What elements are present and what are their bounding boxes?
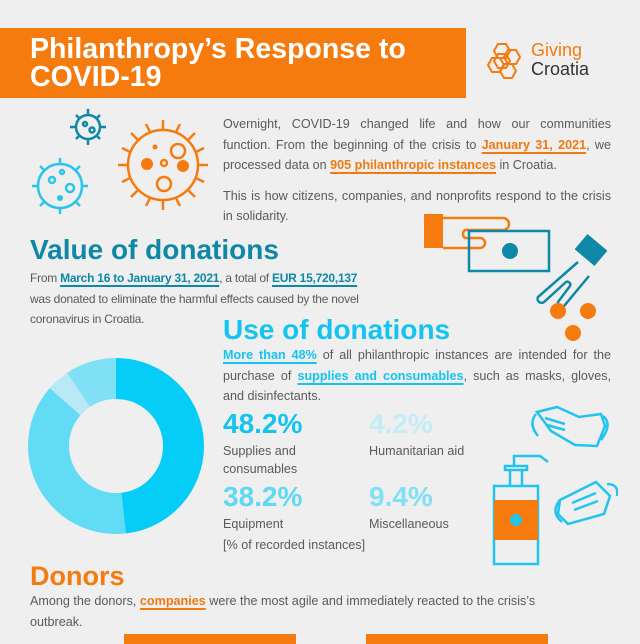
stat: 48.2%: 48.2% — [223, 408, 302, 439]
intro text — [223, 117, 611, 223]
title: COVID-19 — [30, 61, 161, 93]
orange boxes — [124, 634, 296, 644]
title banner — [0, 28, 466, 98]
title — [30, 33, 406, 93]
stat: 38.2%: Equipment — [223, 517, 283, 531]
value text: coronavirus in Croatia. — [30, 312, 144, 326]
note: [% of recorded instances] — [223, 538, 365, 552]
logo: Giving Croatia: Giving — [531, 40, 582, 60]
donors text: Among the donors, companies were the most agile and immediately reacted to the crisis’s outbreak. — [30, 594, 535, 628]
heading: Use of donations: Use of donations — [223, 314, 450, 345]
stat: 9.4% — [369, 481, 449, 531]
stat: 48.2% — [223, 408, 302, 476]
stat: 9.4%: 9.4% — [369, 481, 433, 512]
value text: was donated to eliminate the harmful effects caused by the novel — [30, 292, 359, 306]
stat: 9.4%: Miscellaneous — [369, 517, 449, 531]
intro text: Overnight, COVID-19 changed life and how our communities function. From the beginning of the crisis to January 31, 2021, we processed data on 905 philanthropic instances in Croatia. — [223, 117, 611, 172]
intro text: This is how citizens, companies, and nonprofits respond to the crisis in solidarity. — [223, 188, 611, 223]
value text: From March 16 to January 31, 2021, a total of EUR 15,720,137 — [30, 271, 357, 285]
stat: 38.2% — [223, 481, 302, 531]
stat: 4.2%: Humanitarian aid — [369, 444, 464, 458]
stat: 48.2%: Supplies and — [223, 444, 296, 458]
use text: More than 48% of all philanthropic instances are intended for the purchase of supplies and consumables, such as masks, gloves, and disinfectants. — [223, 348, 611, 403]
logo: Giving Croatia: Croatia — [531, 59, 589, 79]
value text — [30, 271, 359, 326]
logo: Giving Croatia — [486, 40, 589, 79]
icon: hands giving money — [424, 214, 608, 341]
stat: 4.2%: 4.2% — [369, 408, 433, 439]
title: Philanthropy’s Response to — [30, 33, 406, 65]
stat: 48.2%: consumables — [223, 462, 297, 476]
donut chart — [28, 358, 204, 534]
orange box 2 — [366, 634, 548, 644]
heading: Value of donations: Value of donations — [30, 234, 279, 265]
icon: viruses — [32, 109, 208, 214]
stat: 38.2%: 38.2% — [223, 481, 302, 512]
icon: sanitizer and masks — [492, 406, 618, 566]
stat: 4.2% — [369, 408, 464, 458]
heading: Donors: Donors — [30, 561, 124, 591]
